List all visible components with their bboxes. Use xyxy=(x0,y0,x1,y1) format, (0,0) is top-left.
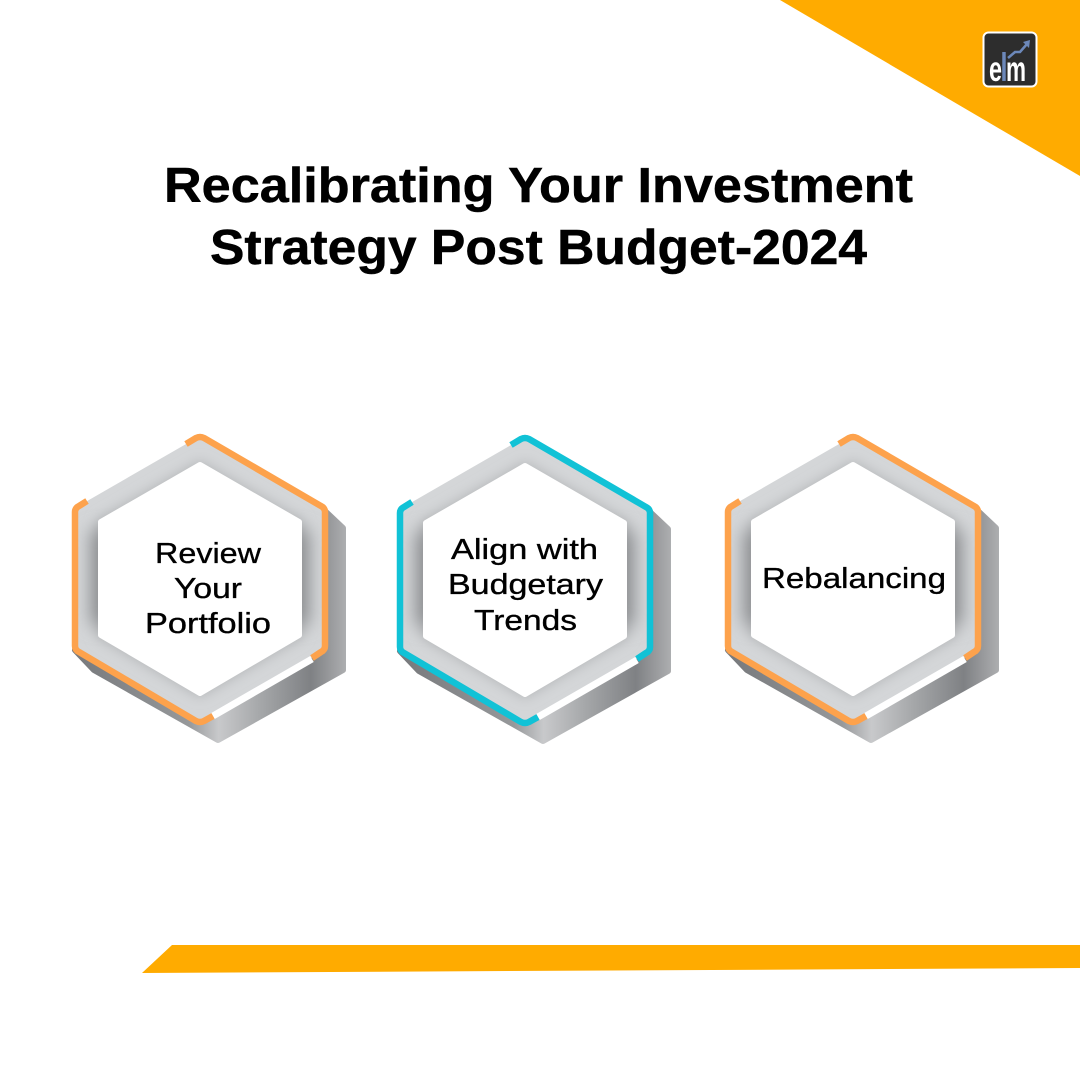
panel: rebalancing xyxy=(728,436,996,740)
label: review your portfolio: Your xyxy=(174,573,242,605)
title xyxy=(164,159,913,275)
label: align with budgetary trends xyxy=(448,534,604,637)
label: review your portfolio: Review xyxy=(155,538,262,570)
panel: review your portfolio xyxy=(75,436,343,740)
label: align with budgetary trends: Align with xyxy=(451,534,598,566)
label: align with budgetary trends: Budgetary xyxy=(448,569,604,601)
label: align with budgetary trends: Trends xyxy=(474,605,577,637)
top-right corner triangle xyxy=(780,0,1080,176)
title: Strategy Post Budget-2024 xyxy=(210,221,867,275)
panel: align with budgetary trends xyxy=(400,437,668,741)
hexagon: orange frame xyxy=(75,436,343,740)
label: review your portfolio xyxy=(145,538,271,640)
logo: elm: e xyxy=(989,50,1002,89)
logo: elm: l xyxy=(1000,46,1008,90)
hexagon: orange frame xyxy=(728,436,996,740)
bottom accent bar xyxy=(142,945,1080,973)
hexagon: teal frame xyxy=(400,437,668,741)
logo: elm xyxy=(984,32,1036,90)
logo arrow xyxy=(1008,40,1030,58)
label: rebalancing: Rebalancing xyxy=(762,563,946,595)
logo: elm: m xyxy=(1006,50,1026,89)
label: review your portfolio: Portfolio xyxy=(145,608,271,640)
title: Recalibrating Your Investment xyxy=(164,159,913,213)
